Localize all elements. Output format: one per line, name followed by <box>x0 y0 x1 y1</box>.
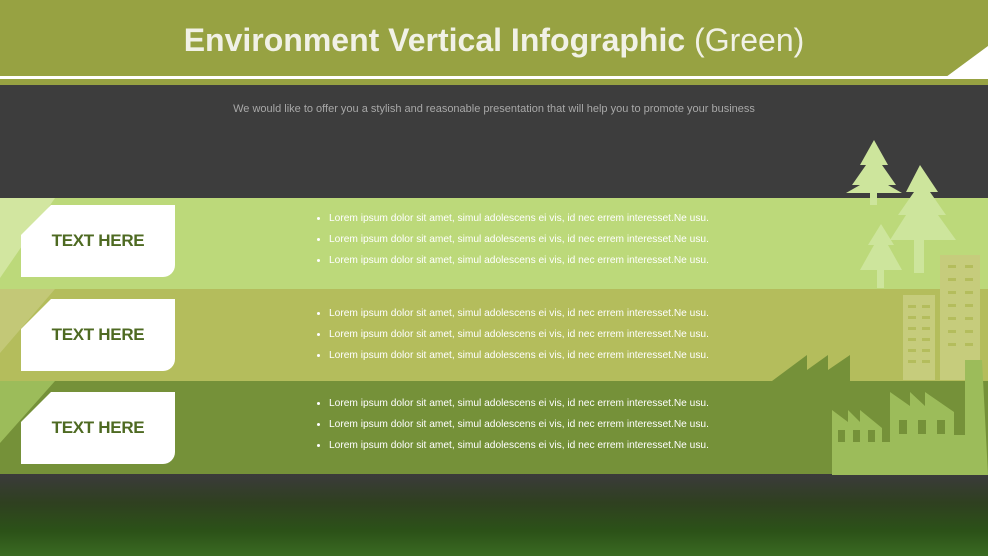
title: Environment Vertical Infographic (Green) <box>184 22 804 58</box>
cards <box>21 205 175 277</box>
diagonal accents <box>0 198 55 443</box>
text: Lorem ipsum dolor sit amet, simul adolescens ei vis, id nec errem interesset.Ne usu. <box>329 308 709 319</box>
text: Lorem ipsum dolor sit amet, simul adolescens ei vis, id nec errem interesset.Ne usu. <box>329 419 709 430</box>
header band <box>0 0 988 85</box>
illustration: trees, buildings, factories <box>772 140 988 475</box>
text: Lorem ipsum dolor sit amet, simul adolescens ei vis, id nec errem interesset.Ne usu. <box>329 329 709 340</box>
bullet lists: Lorem ipsum dolor sit amet, simul adolescens ei vis, id nec errem interesset.Ne usu. <box>329 213 709 224</box>
bullet lists: Lorem ipsum dolor sit amet, simul adolescens ei vis, id nec errem interesset.Ne usu. <box>329 255 709 266</box>
text: TEXT HERE <box>52 325 144 344</box>
grass <box>0 474 988 556</box>
bullet lists: Lorem ipsum dolor sit amet, simul adolescens ei vis, id nec errem interesset.Ne usu. <box>329 234 709 245</box>
cards: TEXT HERE <box>52 231 144 250</box>
text: Lorem ipsum dolor sit amet, simul adolescens ei vis, id nec errem interesset.Ne usu. <box>329 440 709 451</box>
bands <box>0 198 988 289</box>
subtitle: We would like to offer you a stylish and reasonable presentation that will help you to promote your business <box>233 103 755 115</box>
text: Lorem ipsum dolor sit amet, simul adolescens ei vis, id nec errem interesset.Ne usu. <box>329 398 709 409</box>
bullet lists <box>317 213 709 266</box>
text: TEXT HERE <box>52 418 144 437</box>
text: Lorem ipsum dolor sit amet, simul adolescens ei vis, id nec errem interesset.Ne usu. <box>329 350 709 361</box>
